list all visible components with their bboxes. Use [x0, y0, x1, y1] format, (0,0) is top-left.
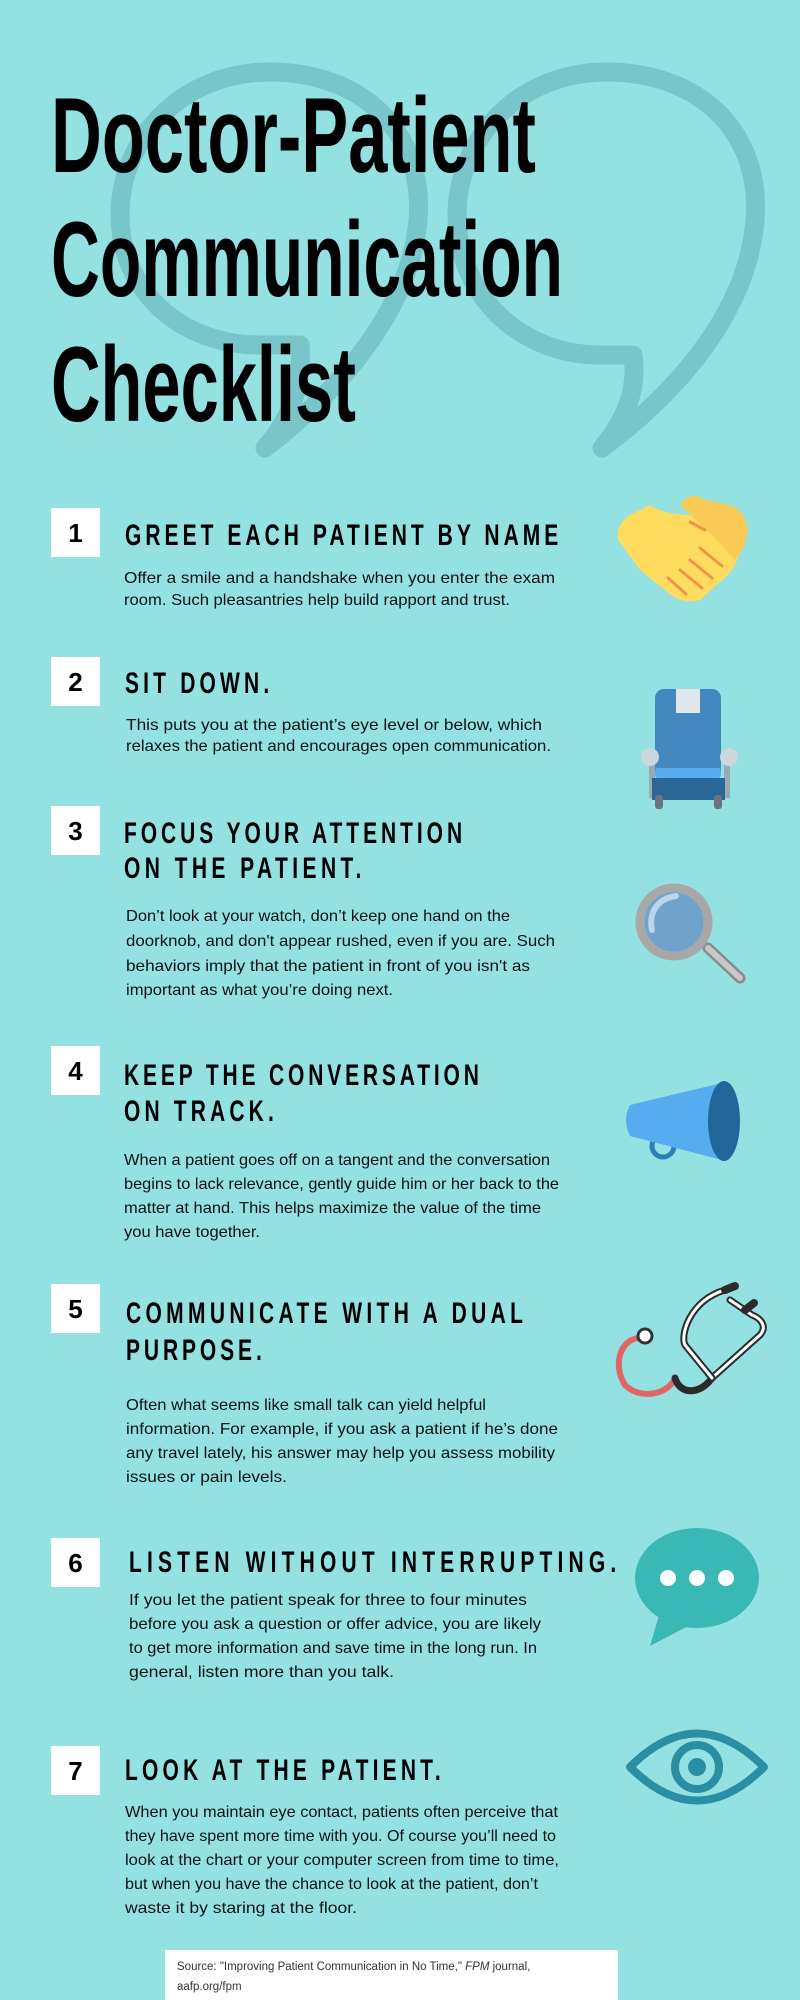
- heading 5: PURPOSE.: [126, 1335, 262, 1367]
- body 1: [124, 570, 555, 609]
- icon: stethoscope: [619, 1286, 763, 1394]
- number box 7: [51, 1746, 100, 1795]
- body 7: they have spent more time with you. Of course you’ll need to: [125, 1828, 556, 1845]
- body 6: before you ask a question or offer advice, you are likely: [129, 1616, 541, 1633]
- body 4: you have together.: [124, 1224, 260, 1241]
- number box 5: 5: [68, 1294, 83, 1324]
- number box 3: [51, 806, 100, 855]
- body 7: but when you have the chance to look at the patient, don’t: [125, 1876, 539, 1893]
- source box: [165, 1950, 618, 2000]
- heading 1: GREET EACH PATIENT BY NAME: [125, 520, 558, 552]
- item 2: [51, 657, 551, 755]
- heading 3: [124, 818, 462, 885]
- body 6: [129, 1592, 541, 1681]
- body 1: room. Such pleasantries help build rapport and trust.: [124, 592, 510, 609]
- body 2: This puts you at the patient’s eye level or below, which: [126, 717, 542, 734]
- body 7: look at the chart or your computer screen from time to time,: [125, 1852, 559, 1869]
- body 2: relaxes the patient and encourages open communication.: [126, 738, 551, 755]
- number box 2: [51, 657, 100, 706]
- icon: magnifier: [640, 888, 740, 978]
- heading 4: ON TRACK.: [124, 1096, 274, 1128]
- body 5: Often what seems like small talk can yield helpful: [126, 1397, 486, 1414]
- body 3: Don’t look at your watch, don’t keep one hand on the: [126, 908, 510, 925]
- heading 6: LISTEN WITHOUT INTERRUPTING.: [129, 1547, 616, 1579]
- heading 5: [126, 1298, 523, 1367]
- body 5: information. For example, if you ask a patient if he’s done: [126, 1421, 558, 1438]
- body 4: [124, 1152, 559, 1241]
- body 5: any travel lately, his answer may help you assess mobility: [126, 1445, 555, 1462]
- heading 7: LOOK AT THE PATIENT.: [125, 1755, 441, 1787]
- source box: Source: "Improving Patient Communication in No Time," FPM journal,: [177, 1961, 530, 1973]
- number box 6: 6: [68, 1548, 83, 1578]
- body 4: When a patient goes off on a tangent and the conversation: [124, 1152, 550, 1169]
- body 4: begins to lack relevance, gently guide him or her back to the: [124, 1176, 559, 1193]
- item 4: [51, 1046, 559, 1241]
- source box: aafp.org/fpm: [177, 1981, 242, 1993]
- background quote marks: [120, 72, 756, 448]
- body 4: matter at hand. This helps maximize the value of the time: [124, 1200, 541, 1217]
- body 6: to get more information and save time in the long run. In: [129, 1640, 537, 1657]
- item 7: [51, 1746, 559, 1917]
- item 6: [51, 1538, 616, 1681]
- number box 6: [51, 1538, 100, 1587]
- body 6: If you let the patient speak for three to four minutes: [129, 1592, 527, 1609]
- icon: chair: [641, 689, 738, 809]
- icon: megaphone: [626, 1081, 740, 1161]
- heading 3: ON THE PATIENT.: [124, 853, 361, 885]
- icon: eye: [630, 1734, 764, 1800]
- title: [51, 75, 563, 444]
- icon: handshake: [618, 496, 748, 601]
- heading 5: COMMUNICATE WITH A DUAL: [126, 1298, 523, 1330]
- body 7: waste it by staring at the floor.: [124, 1900, 357, 1917]
- heading 2: SIT DOWN.: [125, 668, 269, 700]
- icon: speech bubble: [635, 1528, 759, 1646]
- item 3: [51, 806, 555, 999]
- body 7: When you maintain eye contact, patients often perceive that: [125, 1804, 559, 1821]
- number box 4: 4: [68, 1056, 83, 1086]
- body 3: doorknob, and don't appear rushed, even if you are. Such: [126, 933, 555, 950]
- body 5: issues or pain levels.: [126, 1469, 287, 1486]
- number box 2: 2: [68, 667, 83, 697]
- body 1: Offer a smile and a handshake when you enter the exam: [124, 570, 555, 587]
- heading 4: [124, 1060, 479, 1128]
- heading 4: KEEP THE CONVERSATION: [124, 1060, 479, 1092]
- body 7: [124, 1804, 559, 1917]
- body 3: [126, 908, 555, 999]
- item 1: [51, 508, 558, 609]
- item 5: [51, 1284, 558, 1486]
- number box 1: 1: [68, 518, 83, 548]
- number box 5: [51, 1284, 100, 1333]
- body 3: important as what you’re doing next.: [126, 982, 393, 999]
- body 6: general, listen more than you talk.: [129, 1664, 394, 1681]
- body 2: [126, 717, 551, 755]
- heading 3: FOCUS YOUR ATTENTION: [124, 818, 462, 850]
- number box 1: [51, 508, 100, 557]
- title: Checklist: [51, 324, 356, 444]
- body 3: behaviors imply that the patient in front of you isn't as: [126, 958, 530, 975]
- title: Doctor-Patient: [51, 75, 536, 195]
- body 5: [126, 1397, 558, 1486]
- number box 3: 3: [68, 816, 83, 846]
- number box 7: 7: [68, 1756, 83, 1786]
- number box 4: [51, 1046, 100, 1095]
